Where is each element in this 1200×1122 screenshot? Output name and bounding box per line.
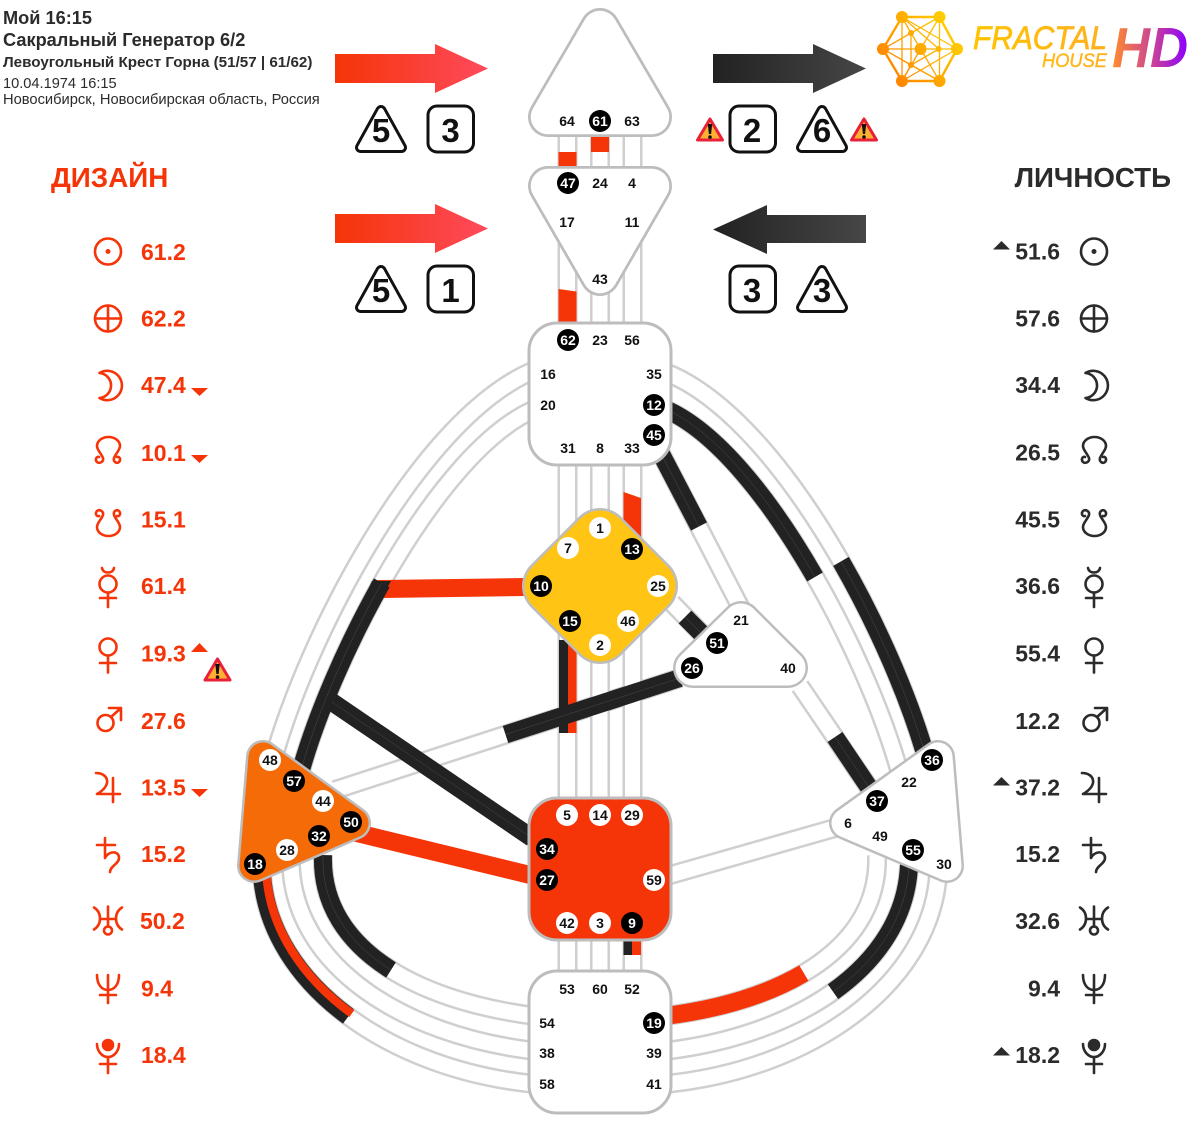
planet column: personality: 32.6 (1015, 908, 1060, 934)
centre: ego: 40 (780, 660, 796, 676)
centre: throat: 31 (560, 440, 576, 456)
centre: head: 61 (592, 113, 608, 129)
centre: throat: 45 (646, 427, 662, 443)
centre: sacral: 59 (646, 872, 662, 888)
centre: solar plexus: 30 (936, 856, 952, 872)
centre: G (530, 517, 669, 656)
centre: root: 58 (539, 1076, 555, 1092)
arrow: design bottom red (335, 204, 488, 253)
planet column: design: 62.2 (141, 306, 186, 332)
centre: root: 19 (646, 1015, 662, 1031)
centre: ajna: 43 (592, 271, 608, 287)
planet column: design: 10.1 (141, 440, 186, 466)
centre: ajna: 47 (560, 175, 576, 191)
icon: warning next to 6 (852, 119, 876, 140)
logo wordmark: HOUSE (1042, 50, 1108, 72)
planet column: design: 13.5 (141, 774, 186, 800)
header text block: Новосибирск, Новосибирская область, Россия (3, 92, 320, 108)
badge: triangle 6 top right: 6 (813, 112, 831, 149)
logo wordmark: HD (1112, 16, 1188, 80)
badge: square 2 top right: 2 (743, 112, 761, 149)
centre: sacral: 5 (563, 807, 571, 823)
centre: G: 25 (650, 578, 666, 594)
centre: root: 60 (592, 981, 608, 997)
channels: grey outlines (262, 130, 938, 1084)
planet column: personality: 45.5 (1015, 506, 1060, 532)
centre: ajna: 11 (625, 214, 640, 230)
badge: square 3 bottom right (730, 266, 776, 312)
centre: solar plexus: 49 (872, 828, 888, 844)
badge: triangle 6 top right (802, 110, 842, 149)
planet column: personality: 37.2 (1015, 774, 1060, 800)
centre: throat (529, 323, 671, 465)
centre: head: 63 (624, 113, 640, 129)
planet column: personality: 15.2 (1015, 841, 1060, 867)
centre: root: 38 (539, 1045, 555, 1061)
centre: root: 41 (646, 1076, 662, 1092)
arrow: personality bottom dark (713, 205, 866, 254)
planet column: personality: 57.6 (1015, 306, 1060, 332)
centre: ego: 51 (709, 635, 725, 651)
centre: solar plexus: 22 (901, 774, 917, 790)
centre: spleen: 57 (286, 773, 302, 789)
centre: solar plexus: 36 (924, 752, 940, 768)
centre: G: 13 (624, 541, 640, 557)
centre: G: 10 (533, 578, 549, 594)
heading: personality: ЛИЧНОСТЬ (1015, 162, 1171, 193)
badge: square 1 bottom: 1 (441, 272, 460, 309)
icon: warning next to 2 (698, 119, 722, 140)
planet column: personality: 12.2 (1015, 708, 1060, 734)
planet column: design: 50.2 (140, 908, 185, 934)
centre: head: 64 (559, 113, 575, 129)
badge: triangle 5 top: 5 (372, 112, 390, 149)
centre: spleen: 48 (262, 752, 278, 768)
planet column: personality: 18.2 (1015, 1042, 1060, 1068)
badge: square 3 top (428, 106, 474, 152)
centre: spleen: 44 (315, 793, 331, 809)
centre: spleen (244, 749, 362, 875)
arrow: design top red (335, 44, 488, 93)
centre: throat: 35 (646, 366, 662, 382)
centre: ego: 26 (684, 660, 700, 676)
centre: ajna: 17 (559, 214, 575, 230)
centre: sacral: 9 (628, 915, 636, 931)
centre: sacral: 42 (559, 915, 575, 931)
centre: throat: 12 (646, 397, 662, 413)
badge: triangle 5 bottom: 5 (372, 272, 390, 309)
header text block: 10.04.1974 16:15 (3, 76, 117, 92)
logo wordmark: FRACTAL (973, 20, 1107, 56)
centre: ajna: 4 (628, 175, 636, 191)
planet column: design: 9.4 (141, 976, 173, 1002)
badge: square 1 bottom (428, 266, 474, 312)
badge: triangle 3 bottom right: 3 (813, 272, 831, 309)
planet column: design: 61.4 (141, 573, 186, 599)
centre: spleen: 50 (343, 814, 359, 830)
centre: solar plexus: 6 (844, 815, 852, 831)
centre: root: 53 (559, 981, 575, 997)
badge: triangle 3 bottom right (802, 270, 842, 309)
centre: G: 7 (564, 540, 572, 556)
planet column: design: 18.4 (141, 1042, 186, 1068)
planet column: personality (993, 238, 1108, 1073)
centre: sacral: 14 (592, 807, 608, 823)
logo network icon (877, 11, 963, 87)
heading: design: ДИЗАЙН (51, 161, 168, 193)
centre: solar plexus: 37 (869, 793, 885, 809)
centre: solar plexus: 55 (905, 842, 921, 858)
badge: triangle 5 bottom (360, 270, 402, 309)
centre: ego (681, 612, 796, 679)
planet column: design: 47.4 (141, 372, 186, 398)
header text block: Сакральный Генератор 6/2 (3, 30, 245, 50)
centre: sacral (529, 798, 671, 940)
planet column: personality: 34.4 (1015, 372, 1060, 398)
planet column: personality: 55.4 (1015, 640, 1060, 666)
planet column: personality: 51.6 (1015, 238, 1060, 264)
centre: G: 2 (596, 637, 604, 653)
badge: square 2 top right (730, 106, 776, 152)
centre: spleen: 18 (247, 856, 263, 872)
arrow: personality top dark (713, 44, 866, 93)
planet column: personality: 36.6 (1015, 573, 1060, 599)
planet column: design: 15.2 (141, 841, 186, 867)
planet column: design: 19.3 (141, 640, 186, 666)
planet column: design (94, 238, 208, 1073)
centre: root: 54 (539, 1015, 555, 1031)
planet column: design: 15.1 (141, 506, 186, 532)
channels: active red segments (355, 137, 877, 1016)
planet column: design: 27.6 (141, 708, 186, 734)
header text block (3, 8, 320, 108)
centre: ajna (548, 172, 652, 287)
centre: throat: 56 (624, 332, 640, 348)
icon: warning next to Venus (205, 659, 230, 680)
badge: square 3 bottom right: 3 (743, 272, 761, 309)
centre: throat: 20 (540, 397, 556, 413)
centre: spleen: 28 (279, 842, 295, 858)
planet column: personality: 26.5 (1015, 440, 1060, 466)
centre: throat: 16 (540, 366, 556, 382)
centre: root: 52 (624, 981, 640, 997)
channels: active black segments (262, 372, 924, 1084)
centre: solar plexus (844, 749, 952, 872)
header text block: Левоугольный Крест Горна (51/57 | 61/62) (3, 54, 312, 71)
header text block: Мой 16:15 (3, 8, 92, 28)
centre: throat: 23 (592, 332, 608, 348)
badge: square 3 top: 3 (441, 112, 460, 149)
centre: G: 15 (562, 613, 578, 629)
centre: root: 39 (646, 1045, 662, 1061)
centre: sacral: 29 (624, 807, 640, 823)
centre: sacral: 3 (596, 915, 604, 931)
centre: throat: 8 (596, 440, 604, 456)
centre: ego: 21 (733, 612, 749, 628)
centre: throat: 62 (560, 332, 576, 348)
centre: G: 1 (596, 520, 604, 536)
centre: G: 46 (620, 613, 636, 629)
logo: Fractal House HD (877, 11, 1188, 87)
centre: throat: 33 (624, 440, 640, 456)
centre: root (529, 971, 671, 1113)
centre: head (548, 28, 652, 132)
planet column: design: 61.2 (141, 239, 186, 265)
logo wordmark (973, 16, 1188, 80)
centre: sacral: 34 (539, 841, 555, 857)
centre: sacral: 27 (539, 872, 555, 888)
centre: spleen: 32 (311, 828, 327, 844)
centre: ajna: 24 (592, 175, 608, 191)
planet column: personality: 9.4 (1028, 976, 1060, 1002)
badge: triangle 5 top (360, 110, 402, 149)
